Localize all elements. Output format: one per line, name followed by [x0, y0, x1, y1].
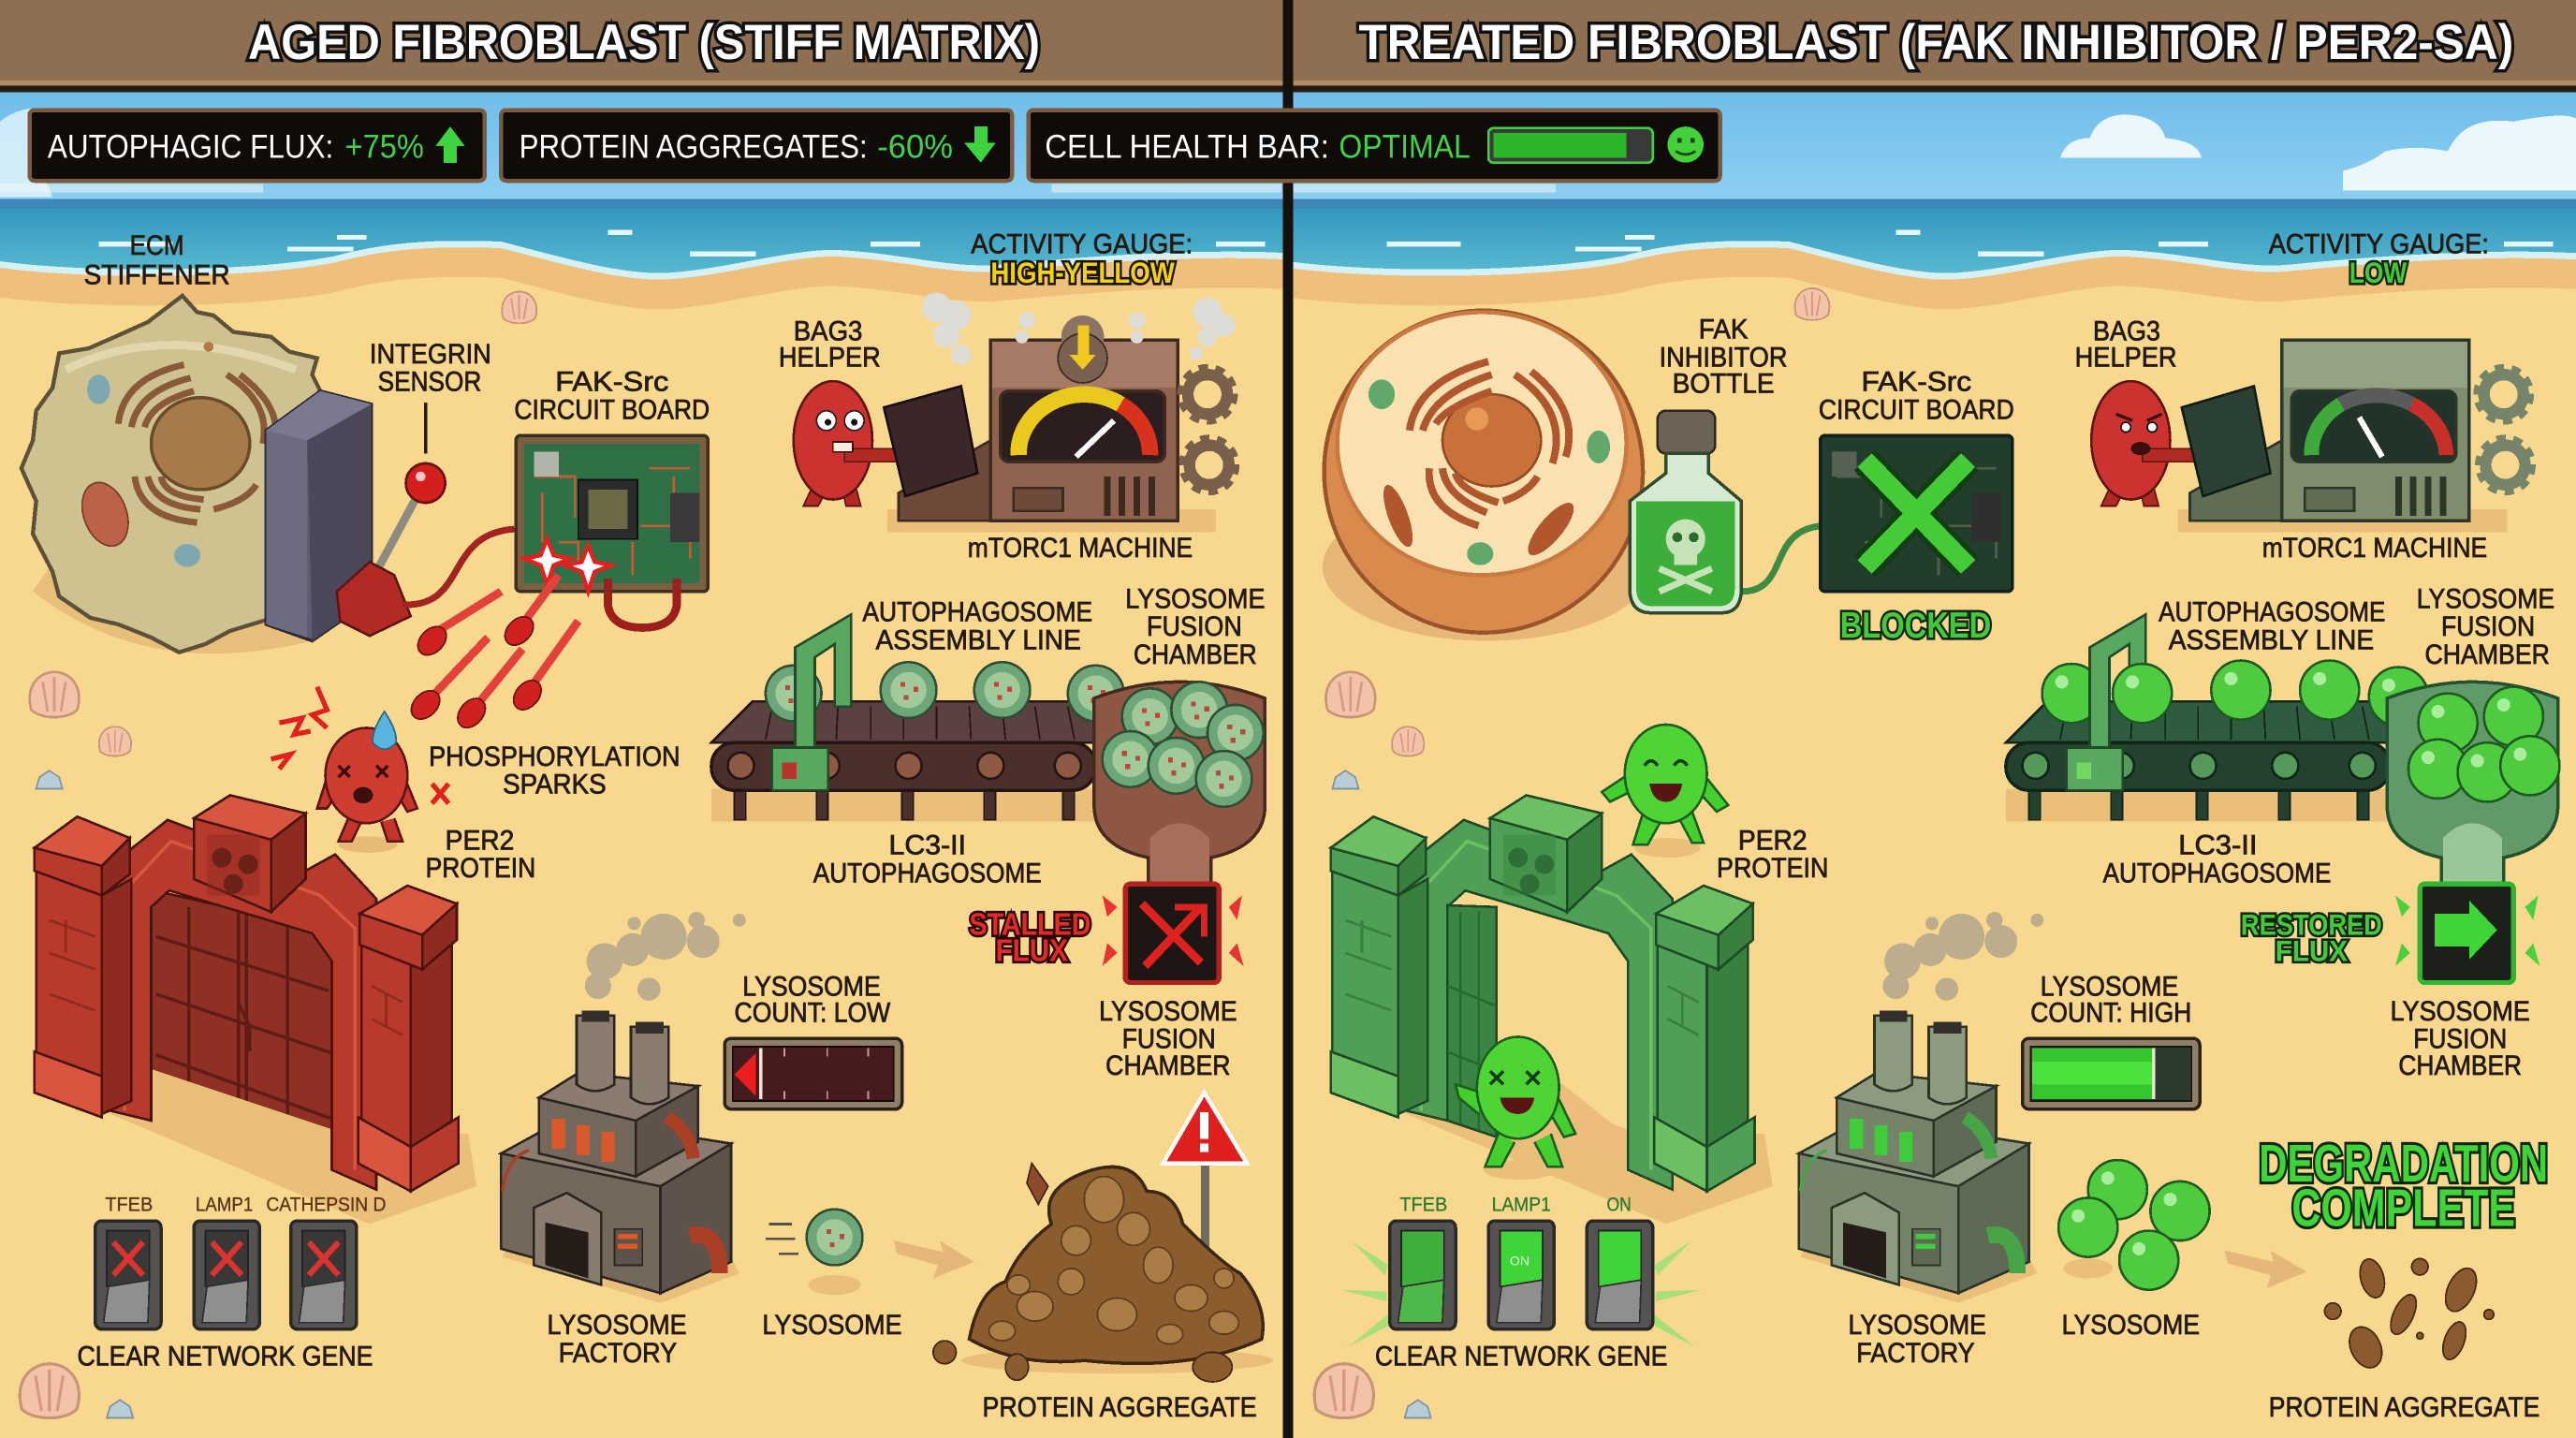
LC3-II label: LC3-II [889, 830, 966, 861]
autophagosome assembly line label: ASSEMBLY LINE [875, 624, 1081, 655]
lysosome fusion chamber label lower [1099, 996, 1237, 1081]
fusion chamber label lower treated [2391, 996, 2530, 1081]
LC3-II label: AUTOPHAGOSOME [813, 858, 1042, 888]
BAG3 helper character [794, 381, 900, 506]
icon: down arrow [964, 126, 996, 163]
FAK inhibitor bottle label: INHIBITOR [1660, 342, 1788, 373]
activity gauge high [1018, 394, 1150, 457]
panel: treated fibroblast scene [1323, 228, 2559, 1423]
lysosome count label: COUNT: LOW [735, 998, 891, 1029]
open green gate [1331, 795, 1773, 1225]
PER2 protein label: PER2 [446, 825, 514, 856]
degradation complete label: COMPLETE [2291, 1178, 2515, 1237]
ECM stiffener label: ECM [130, 230, 184, 261]
switches on [1390, 1221, 1653, 1329]
green glow rays [1340, 1240, 1702, 1347]
activity gauge label [971, 228, 1193, 289]
lysosome factory label: LYSOSOME [547, 1310, 687, 1341]
BAG3 helper label: BAG3 [794, 315, 862, 346]
fusion chamber label lower treated: LYSOSOME [2391, 996, 2530, 1027]
panel divider [1283, 0, 1293, 1438]
per2 protein passing gate [1456, 1036, 1575, 1180]
fusion chamber label top treated: CHAMBER [2425, 639, 2550, 670]
PER2 protein label: PROTEIN [426, 853, 535, 884]
lever [337, 463, 446, 636]
FAK-Src label treated: FAK-Src [1862, 367, 1971, 398]
lysosome factory treated [1799, 912, 2043, 1303]
pushed block [884, 386, 977, 496]
happy per2 protein [1602, 725, 1728, 858]
lysosome fusion chamber label lower: FUSION [1122, 1024, 1216, 1055]
integrin sensor label: INTEGRIN [370, 339, 491, 370]
switch labels treated: ON [1606, 1194, 1632, 1215]
lysosome factory [501, 912, 746, 1303]
PER2 protein label [426, 825, 535, 884]
switch labels treated [1399, 1194, 1632, 1215]
restored flux label [2241, 908, 2382, 968]
stat bar: cell health: OPTIMAL [1339, 128, 1471, 165]
FAK-Src label treated: CIRCUIT BOARD [1819, 395, 2014, 426]
lysosome fusion chamber label top [1125, 583, 1265, 670]
phosphorylation spark projectiles [405, 575, 578, 733]
fusion chamber label top treated [2417, 583, 2554, 670]
horizon line [0, 198, 2576, 209]
gears treated [2478, 368, 2532, 492]
gate: sealed nuclear gate [35, 795, 476, 1225]
fusion chamber label lower treated: CHAMBER [2398, 1050, 2522, 1081]
switch labels: TFEB [105, 1194, 153, 1215]
tube to blocked board [1741, 526, 1823, 592]
BAG3 helper label [779, 315, 881, 373]
activity gauge label: HIGH-YELLOW [990, 256, 1175, 289]
lysosome count label high [2030, 972, 2191, 1029]
clear network gene label treated: CLEAR NETWORK GENE [1375, 1341, 1667, 1372]
switch labels: LAMP1 [196, 1194, 253, 1215]
activity gauge label treated: LOW [2349, 256, 2407, 289]
ECM stiffener label: STIFFENER [84, 260, 230, 291]
healthy round cell [1323, 311, 1651, 640]
autophagosome assembly line label [862, 596, 1092, 655]
icon: smiley [1667, 126, 1704, 163]
conveyor belt [711, 614, 1123, 822]
degradation complete label [2259, 1134, 2548, 1237]
lysosome count meter low [724, 1038, 902, 1109]
mTORC1 machine treated [2178, 340, 2507, 533]
integrin sensor label [370, 339, 491, 453]
integrin sensor pillar [266, 391, 372, 640]
clouds [0, 108, 2576, 198]
autophagosome assembly line label: AUTOPHAGOSOME [862, 596, 1092, 627]
FAK inhibitor bottle label: BOTTLE [1673, 368, 1775, 399]
fusion chamber label top treated: FUSION [2441, 611, 2535, 642]
lysosome fusion chamber label top: CHAMBER [1134, 639, 1257, 670]
sand decorations left [20, 292, 536, 1418]
lysosome fusion chamber label top: FUSION [1147, 611, 1242, 642]
stat bar: protein aggregates: -60% [877, 128, 953, 165]
protein aggregate label treated: PROTEIN AGGREGATE [2269, 1392, 2539, 1423]
stat bar: autophagic flux: AUTOPHAGIC FLUX: [48, 128, 333, 165]
arrow to aggregate [894, 1240, 974, 1278]
BAG3 helper label treated: HELPER [2075, 342, 2176, 373]
warning sign [1164, 1093, 1247, 1258]
switches on: ON [1510, 1253, 1530, 1268]
activity gauge low [2311, 395, 2446, 457]
shoreline right [1288, 230, 2576, 391]
blocked circuit board [1821, 435, 2012, 592]
lysosome factory label treated [1848, 1310, 1986, 1369]
LC3-II label treated [2103, 830, 2331, 888]
stalled flux sign [1103, 884, 1244, 983]
fusion chamber bowl treated [2387, 682, 2559, 888]
single lysosome [766, 1210, 862, 1295]
stat bar: protein aggregates [501, 110, 1012, 181]
title: treated fibroblast: TREATED FIBROBLAST (FAK INHIBITOR / PER2-SA) [1358, 15, 2513, 70]
lysosome fusion chamber label top: LYSOSOME [1125, 583, 1265, 614]
stiff aged cell [22, 296, 329, 653]
restored flux label: RESTORED [2241, 908, 2382, 942]
panel: aged fibroblast scene [22, 228, 1273, 1423]
lysosome count meter high [2023, 1038, 2200, 1109]
health bar [1488, 128, 1653, 163]
gears [1181, 368, 1236, 492]
fusion chamber bowl [1094, 682, 1265, 888]
activity gauge label treated: ACTIVITY GAUGE: [2269, 228, 2489, 259]
mTORC1 label treated: mTORC1 MACHINE [2262, 533, 2487, 564]
stalled flux label: STALLED [970, 908, 1090, 943]
lysosome factory label [547, 1310, 687, 1369]
FAK inhibitor bottle label [1660, 315, 1788, 399]
PER2 label treated [1717, 825, 1828, 884]
activity gauge label: ACTIVITY GAUGE: [971, 228, 1193, 259]
lysosome count label high: LYSOSOME [2041, 972, 2178, 1003]
BAG3 helper label: HELPER [779, 342, 881, 373]
switch labels [105, 1194, 386, 1215]
pushed block treated [2182, 386, 2271, 496]
phosphorylation sparks label: SPARKS [503, 770, 607, 800]
integrin sensor label: SENSOR [378, 367, 481, 398]
wire to circuit board [402, 529, 514, 605]
sand decorations right [1314, 288, 1829, 1418]
FAK-Src label [514, 367, 710, 426]
lysosome label treated: LYSOSOME [2062, 1310, 2200, 1341]
stat bar: autophagic flux [30, 110, 485, 181]
stat bar: cell health: CELL HEALTH BAR: [1045, 128, 1329, 165]
lysosome count label [735, 972, 891, 1029]
LC3-II label [813, 830, 1042, 888]
stalled flux label: FLUX [996, 934, 1068, 969]
BAG3 helper label treated [2075, 315, 2176, 373]
LC3-II label treated: AUTOPHAGOSOME [2103, 858, 2331, 888]
PER2 label treated: PER2 [1738, 825, 1808, 856]
lysosome count label: LYSOSOME [742, 972, 881, 1003]
restored flux sign [2395, 884, 2539, 983]
stat bar: cell health [1029, 110, 1720, 181]
assembly line label treated [2159, 596, 2385, 655]
lysosome count label high: COUNT: HIGH [2030, 998, 2191, 1029]
ECM stiffener label [84, 230, 230, 291]
shoreline left [0, 230, 1288, 391]
lysosome fusion chamber label lower: CHAMBER [1105, 1050, 1231, 1081]
sea band [0, 200, 2576, 299]
blocked label: BLOCKED [1840, 606, 1991, 646]
FAK inhibitor bottle label: FAK [1699, 315, 1749, 345]
assembly line label treated: ASSEMBLY LINE [2169, 624, 2374, 655]
stalled flux label [970, 908, 1090, 969]
arrow to degraded aggregate [2224, 1251, 2306, 1288]
lysosome factory label: FACTORY [559, 1338, 677, 1369]
fusion chamber label top treated: LYSOSOME [2417, 583, 2554, 614]
PER2 label treated: PROTEIN [1717, 853, 1828, 884]
assembly line label treated: AUTOPHAGOSOME [2159, 596, 2385, 627]
LC3-II label treated: LC3-II [2178, 830, 2257, 861]
title: aged fibroblast: AGED FIBROBLAST (STIFF MATRIX) [248, 15, 1040, 70]
lysosome label: LYSOSOME [762, 1310, 902, 1341]
icon: up arrow [435, 126, 465, 163]
lysosome fusion chamber label lower: LYSOSOME [1099, 996, 1237, 1027]
clear network gene switches off [95, 1194, 386, 1329]
sky background [0, 91, 2576, 205]
BAG3 helper character treated [2091, 381, 2198, 506]
switches [95, 1221, 357, 1329]
BAG3 helper label treated: BAG3 [2093, 315, 2160, 346]
clear network gene switches on [1340, 1194, 1702, 1347]
circuit board with sparks [516, 435, 708, 627]
sand background [0, 312, 2576, 1438]
green lysosomes [2058, 1160, 2210, 1290]
FAK-Src label: CIRCUIT BOARD [514, 395, 710, 426]
FAK-Src label: FAK-Src [555, 367, 668, 398]
FAK-Src label treated [1819, 367, 2014, 426]
stat bar: protein aggregates: PROTEIN AGGREGATES: [520, 128, 868, 165]
protein aggregate label: PROTEIN AGGREGATE [983, 1392, 1257, 1423]
lysosome factory label treated: LYSOSOME [1848, 1310, 1986, 1341]
protein aggregate pile [933, 1164, 1273, 1382]
FAK inhibitor bottle [1630, 411, 1741, 613]
lysosome factory label treated: FACTORY [1856, 1338, 1975, 1369]
conveyor belt treated [2006, 614, 2428, 822]
per2 protein distressed [271, 687, 448, 853]
restored flux label: FLUX [2276, 934, 2348, 968]
clear network gene label: CLEAR NETWORK GENE [78, 1341, 373, 1372]
phosphorylation sparks label [429, 741, 681, 800]
steam and overheat arrow [922, 292, 1236, 383]
fusion chamber label lower treated: FUSION [2413, 1024, 2507, 1055]
mTORC1 machine [887, 340, 1216, 533]
mTORC1 label: mTORC1 MACHINE [968, 533, 1193, 564]
stat bar: autophagic flux: +75% [345, 128, 424, 165]
phosphorylation sparks label: PHOSPHORYLATION [429, 741, 681, 772]
switch labels treated: LAMP1 [1492, 1194, 1551, 1215]
switch labels treated: TFEB [1399, 1194, 1447, 1215]
degraded protein fragments [2324, 1256, 2494, 1373]
activity gauge label treated [2269, 228, 2489, 289]
header band [0, 0, 2576, 92]
switch labels: CATHEPSIN D [266, 1194, 386, 1215]
